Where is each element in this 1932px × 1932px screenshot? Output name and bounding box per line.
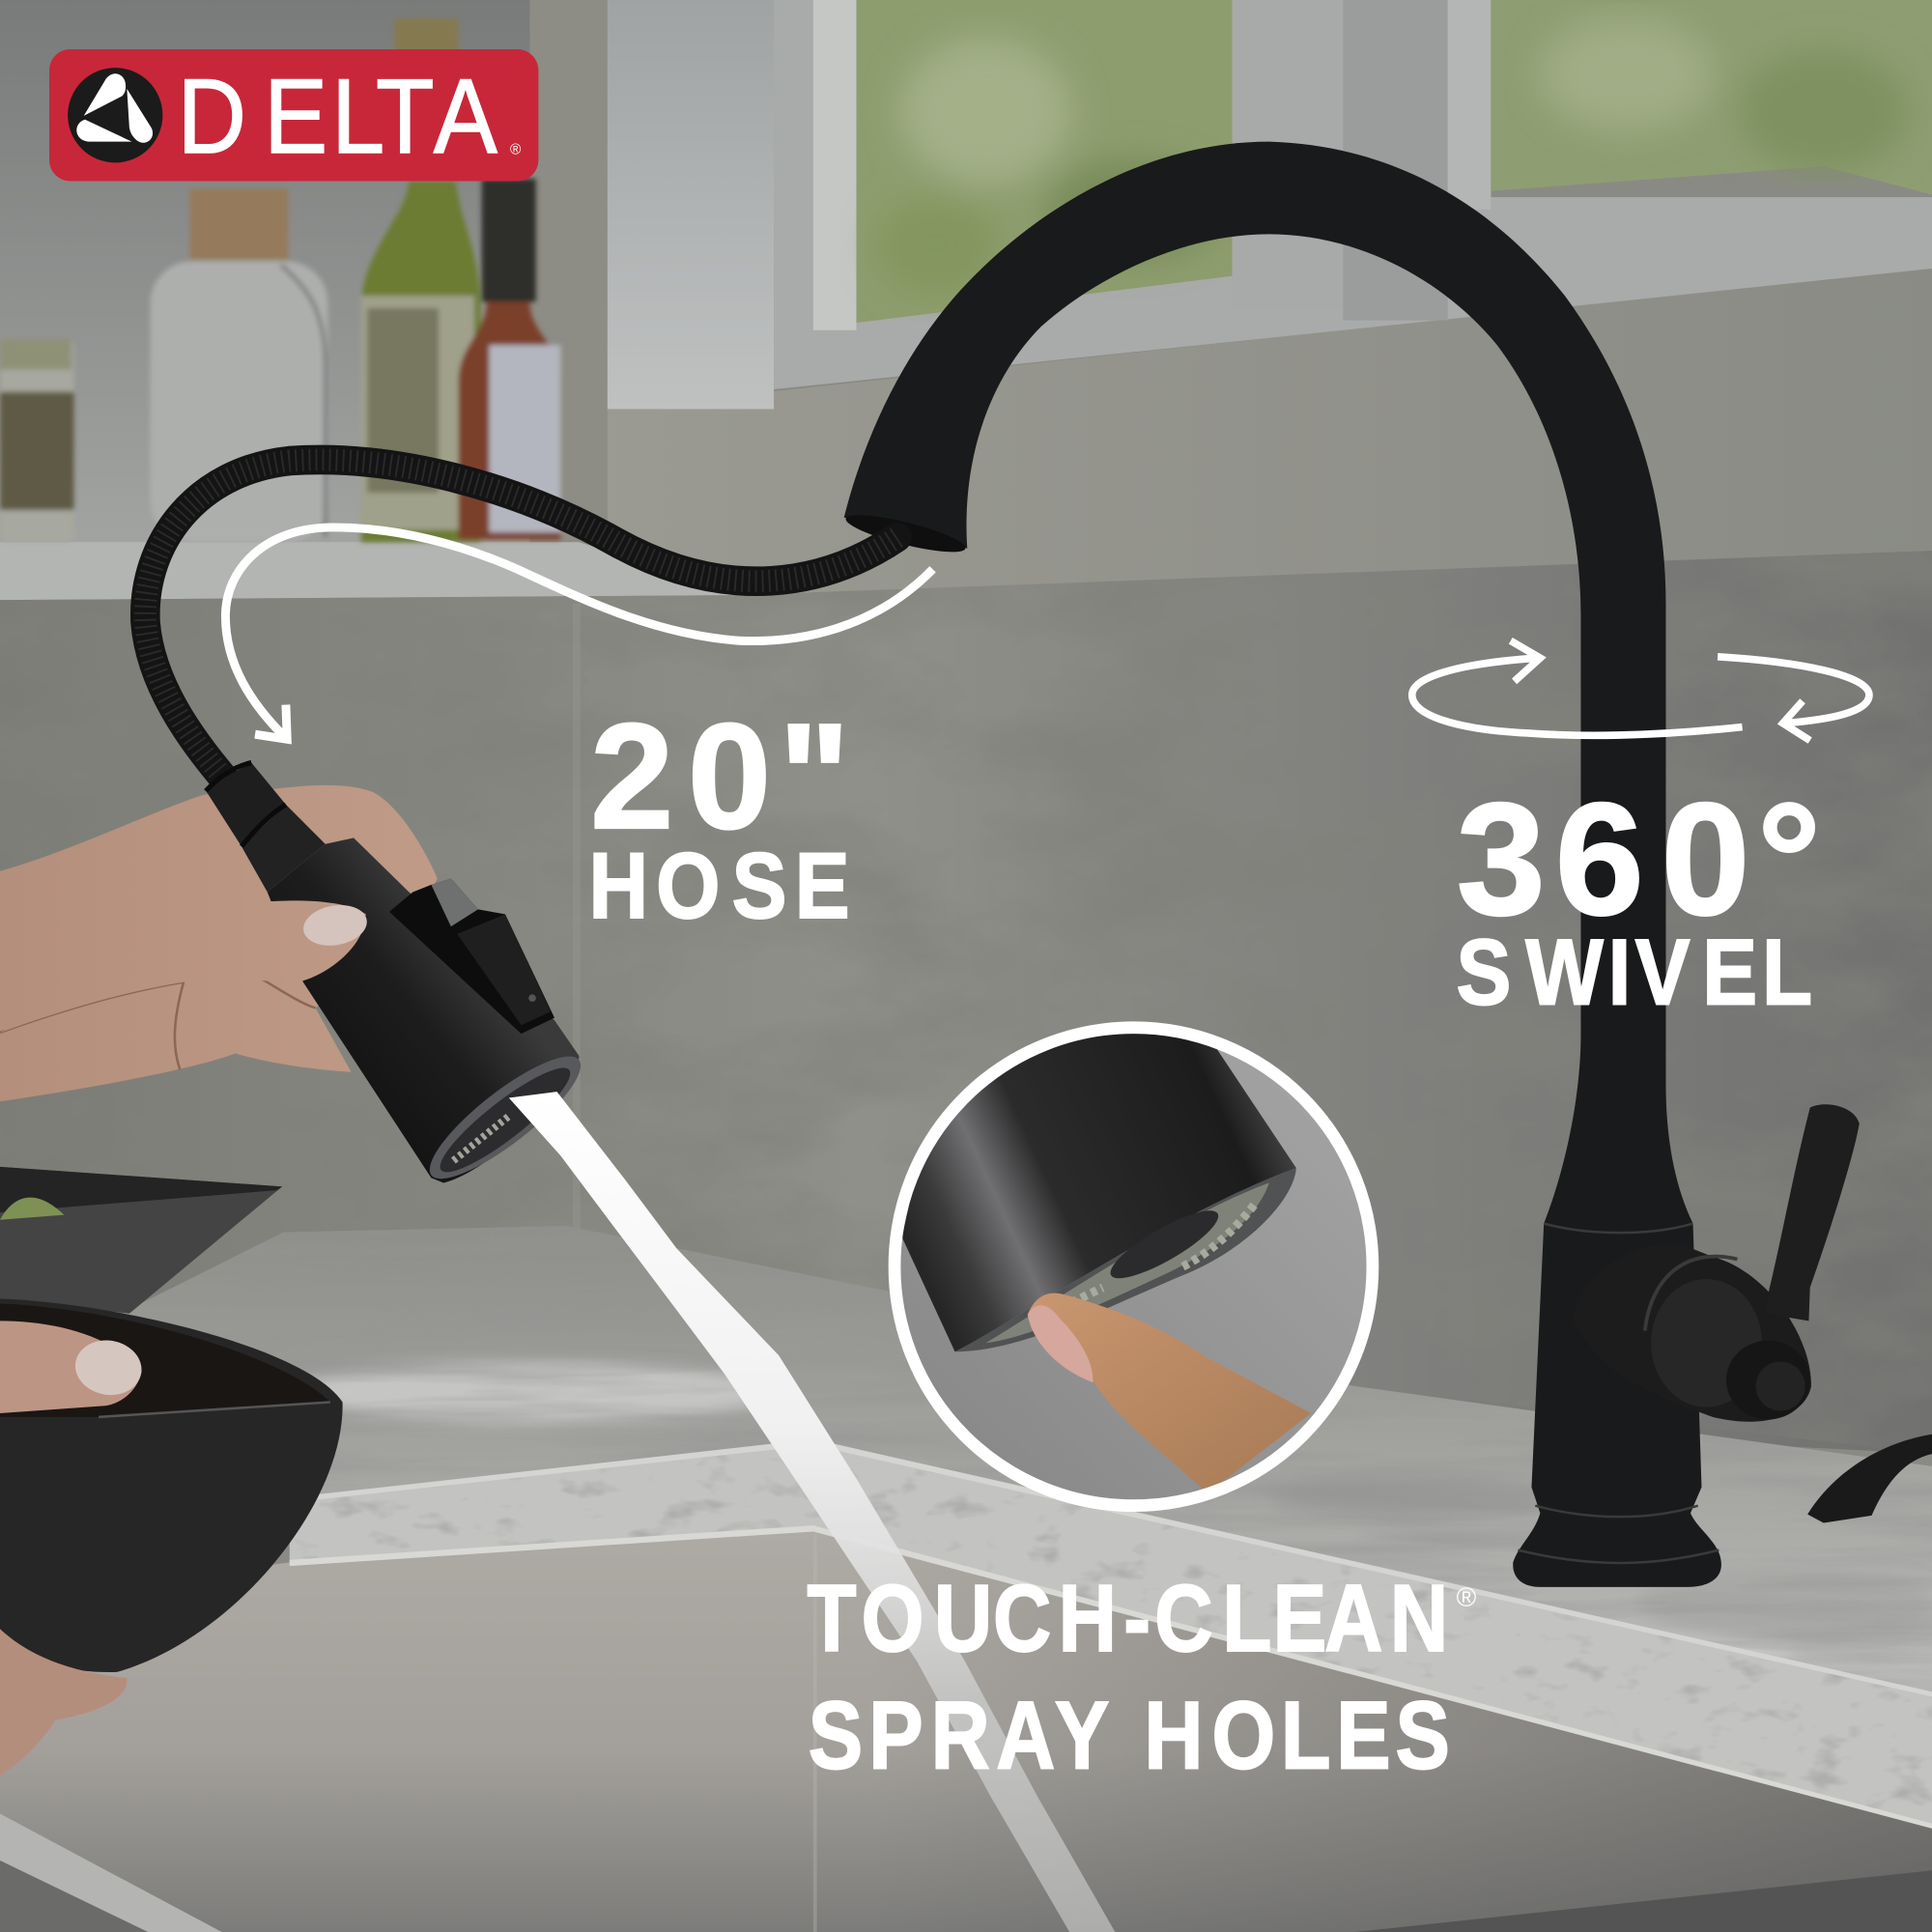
left hand holding sprayer [0,785,438,1101]
hose label: HOSE [588,834,850,938]
water stream [509,1092,1115,1932]
faucet spout and body [844,142,1721,1587]
inset: touch-clean spray holes [895,1010,1373,1506]
touch-clean label: SPRAY HOLES [809,1681,1450,1789]
inset finger [1028,1293,1311,1493]
hot sauce bottle [458,179,560,540]
sprayer toggle button [389,878,554,1034]
black bowl [0,1298,343,1672]
hose length arrow [225,527,933,739]
soap dispenser [1807,1435,1932,1523]
hose label [588,692,850,938]
glass jar with cork [151,188,327,542]
sprayer face [415,1039,595,1196]
braided hose [145,460,897,779]
jar with label [0,339,74,542]
faucet [843,142,1932,1587]
touch-clean label: ® [1457,1582,1477,1612]
sprayer head [268,838,579,1182]
handle hub [1573,1243,1811,1422]
inset sprayer body [902,1010,1296,1351]
shelf bottles [0,18,560,542]
touch-clean label: TOUCH-CLEAN [807,1566,1448,1672]
delta logo: ® [510,141,522,157]
inset sprayer face with holes [955,1168,1296,1351]
hand under bowl [0,1321,146,1776]
index finger [0,900,370,1033]
swivel label: SWIVEL [1456,920,1812,1025]
swivel label: 360° [1457,770,1821,949]
green wine bottle [361,18,480,542]
logo emblem [68,68,162,162]
sprayer connector [205,763,326,892]
lever handle [1765,1104,1860,1321]
bowl of greens [0,1167,282,1314]
pull-down sprayer [205,763,595,1196]
inset nail [1028,1305,1093,1382]
hose label: 20" [590,692,850,860]
touch-clean label [807,1566,1477,1789]
delta logo [49,49,538,181]
bowl thumbnail [71,1335,146,1400]
spout outlet [843,508,968,559]
logo wordmark: DELTA [178,58,497,176]
swivel arrows [1412,640,1869,741]
fingernail [300,900,370,951]
